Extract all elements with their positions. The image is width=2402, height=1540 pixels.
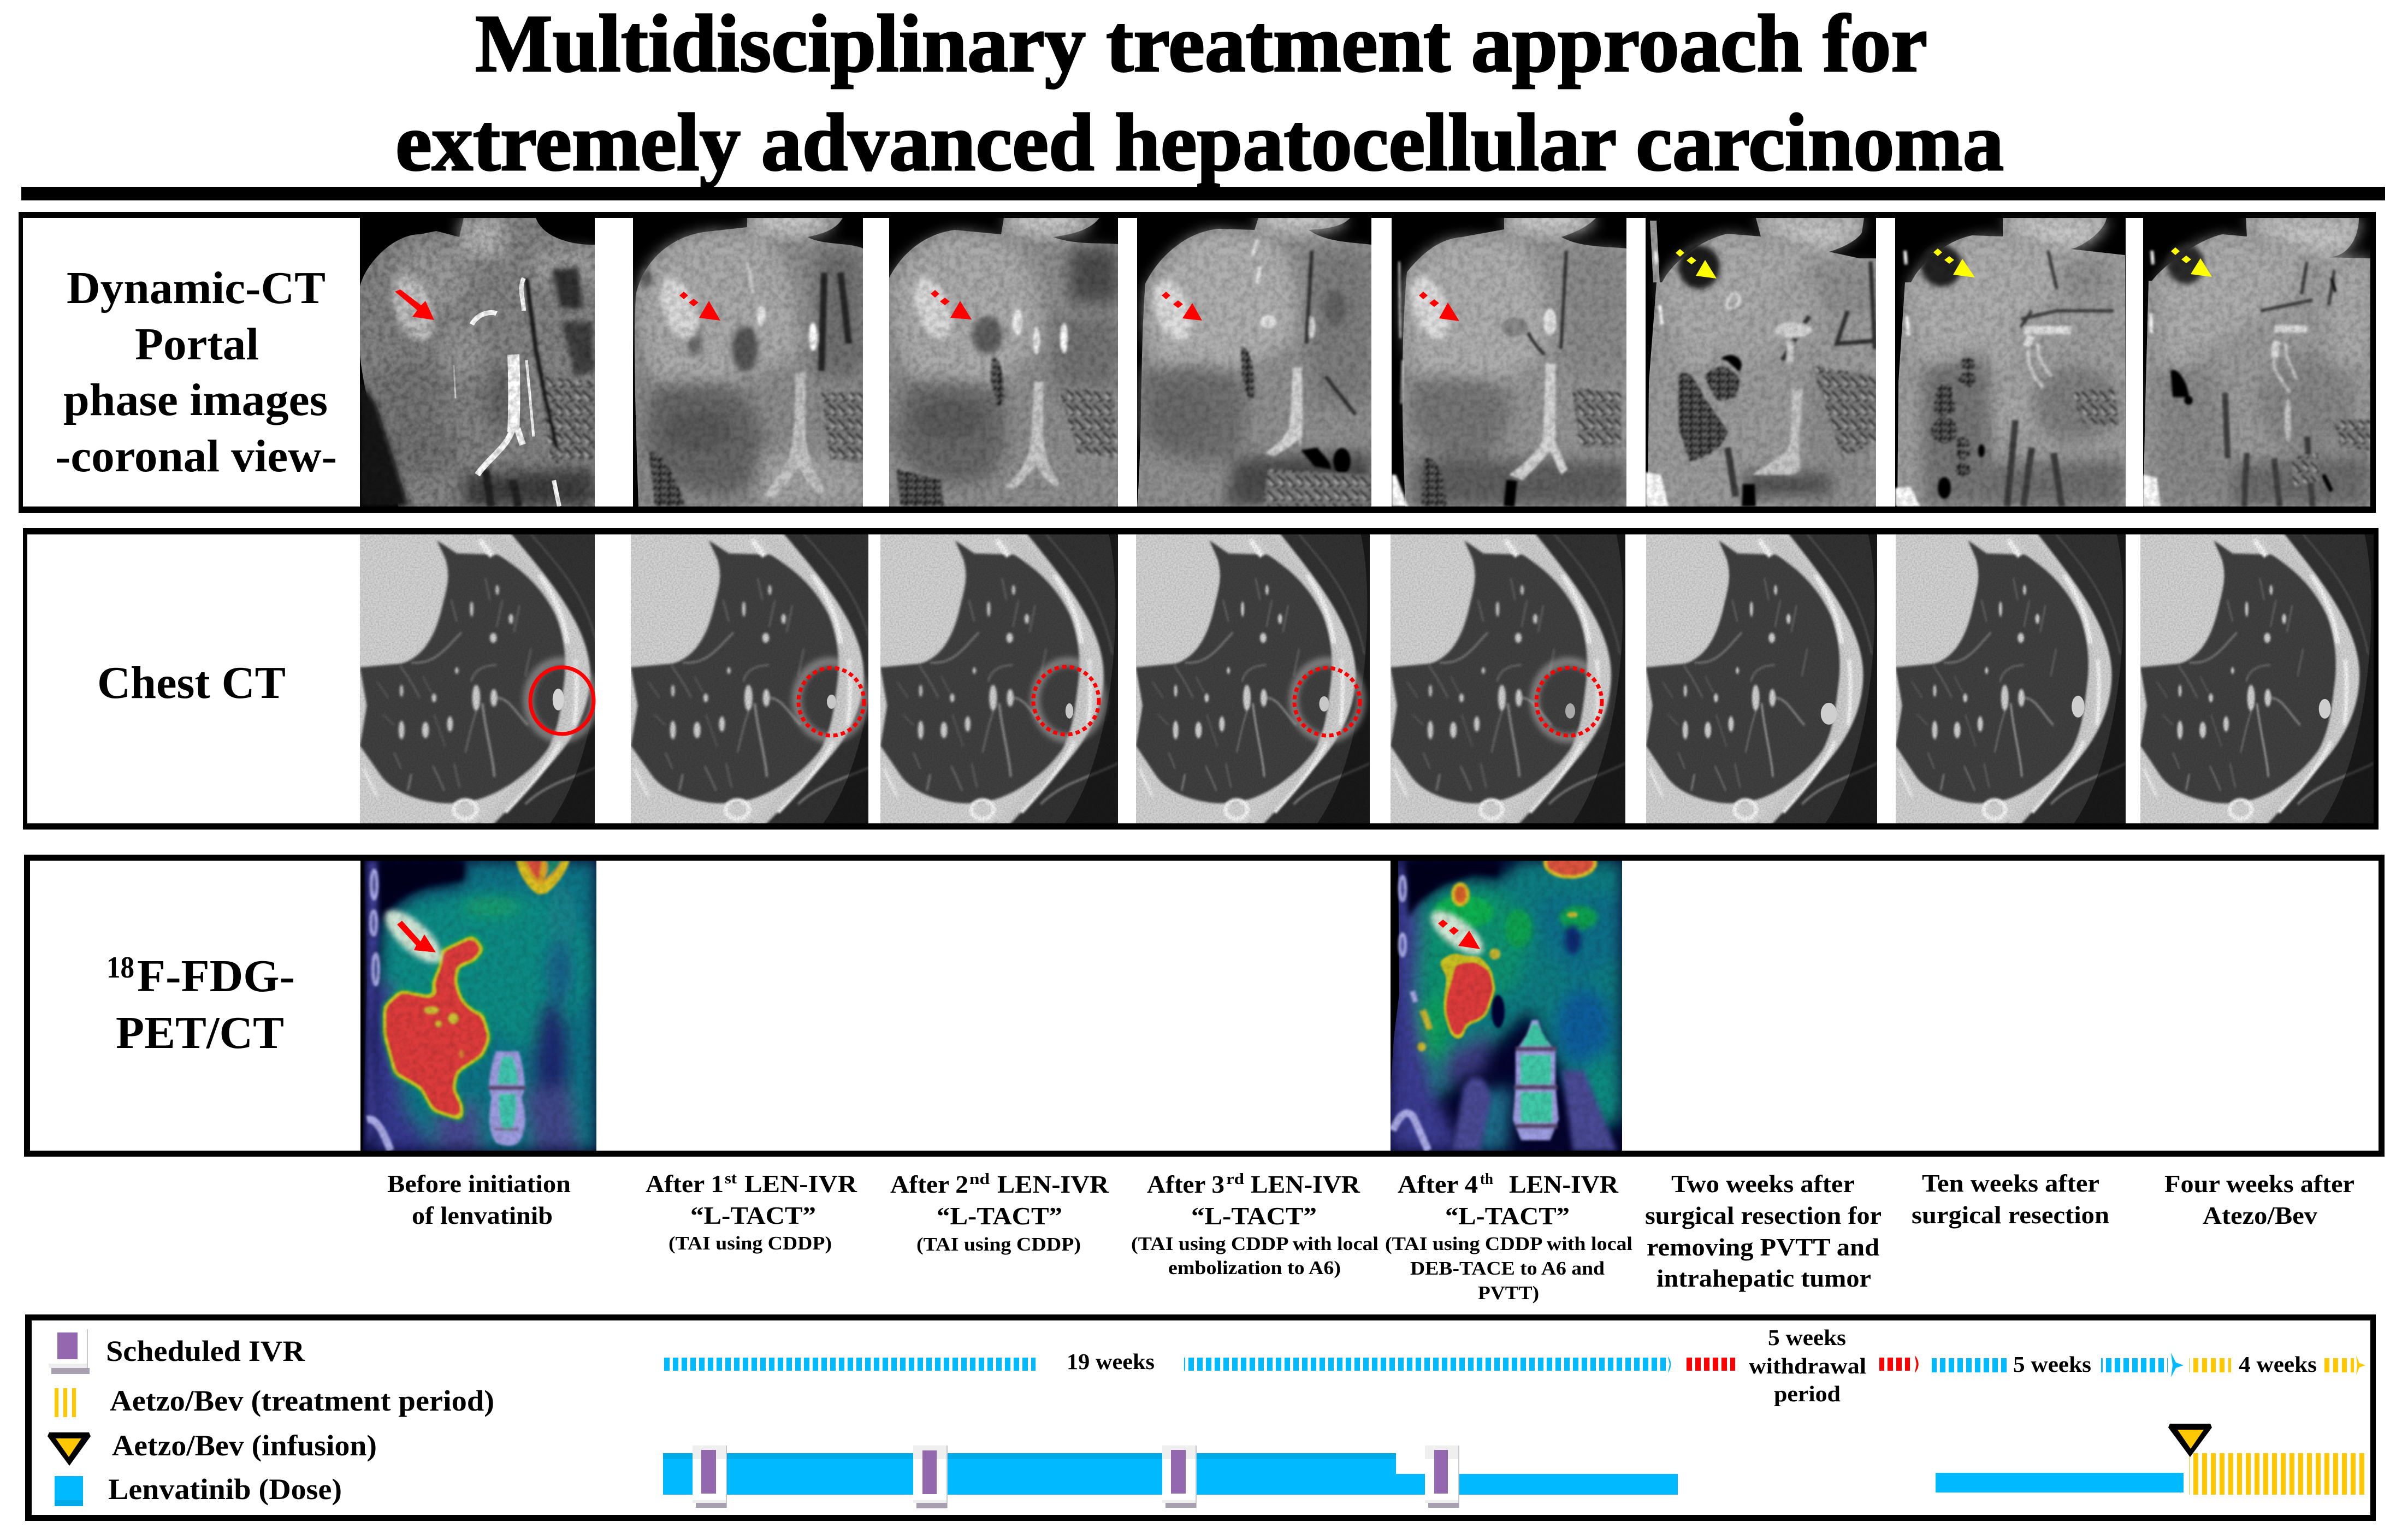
arrow: dotted red, after 1st [679,292,720,321]
marker: IVR 1 [693,1446,727,1508]
label: two weeks after resection: surgical resection for [1645,1201,1882,1229]
row label: PET/CT: F-FDG- [137,951,295,1002]
circle: dotted red, after 1st [798,668,864,736]
duration arrow: withdrawal period: 5 weeks [1768,1325,1846,1350]
label: two weeks after resection: Two weeks after [1671,1170,1855,1198]
label: two weeks after resection: intrahepatic tumor [1656,1264,1871,1292]
legend: scheduled IVR [49,1329,305,1374]
label: after 4th: LEN-IVR [1509,1170,1619,1198]
marker: IVR 3 [1162,1446,1197,1508]
label: after 3rd: After 3 [1147,1170,1224,1198]
CT image: after 1st LEN-IVR [633,218,863,507]
label: four weeks after Atezo/Bev [2164,1170,2354,1229]
label: after 2nd: (TAI using CDDP) [916,1234,1081,1255]
circle: dotted red, after 2nd [1033,667,1099,735]
chest image: after 3rd [1136,532,1375,826]
chest image: after 1st [631,534,868,824]
duration arrow: Atezo/Bev 4 weeks: 4 weeks [2239,1352,2317,1377]
bar: lenvatinib dose after surgery [1936,1473,2184,1492]
row label: dynamic CT: -coronal view- [55,431,337,482]
panel: treatment timeline [25,1314,2376,1521]
arrow: solid red on PET [397,921,436,952]
label: after 3rd: (TAI using CDDP with local [1131,1233,1379,1254]
row label: dynamic CT: phase images [63,375,328,425]
label: two weeks after resection [1645,1170,1882,1292]
CT image: ten weeks after surgery [1895,218,2126,507]
chest image: after 4th [1391,532,1631,826]
row label: PET/CT [107,951,295,1058]
label: two weeks after resection: removing PVTT and [1647,1233,1879,1261]
duration arrow: lenvatinib 5 weeks: 5 weeks [2013,1352,2091,1377]
label: after 4th [1385,1170,1632,1304]
title rule [21,187,2385,200]
row label: PET/CT: 18 [107,951,134,985]
marker: IVR 4 [1425,1446,1459,1508]
label: ten weeks after resection [1912,1169,2109,1229]
label: after 4th: PVTT) [1478,1282,1539,1304]
label: after 2nd: nd [969,1171,990,1188]
legend: Aetzo/Bev treatment period: Aetzo/Bev (treatment period) [110,1384,494,1417]
legend: Aetzo/Bev infusion: Aetzo/Bev (infusion) [112,1429,377,1462]
PET image: after 4th LEN-IVR [1391,849,1622,1151]
arrow: dotted red, after 4th [1419,292,1459,321]
label: after 2nd [890,1170,1109,1255]
PET image: before lenvatinib [360,861,596,1151]
marker: Atezo/Bev infusion [2168,1424,2212,1457]
legend: lenvatinib dose: Lenvatinib (Dose) [108,1473,342,1506]
legend: scheduled IVR: Scheduled IVR [106,1335,305,1367]
duration arrow: lenvatinib 19 weeks: 19 weeks [1067,1349,1155,1374]
circle: solid red nodule marker [530,667,594,734]
label: before initiation: Before initiation [387,1170,571,1198]
label: after 4th: th [1480,1171,1493,1188]
label: four weeks after Atezo/Bev: Four weeks after [2164,1170,2354,1198]
bar: Atezo/Bev treatment [2189,1453,2366,1495]
CT image: after 3rd LEN-IVR [1137,218,1371,507]
label: after 1st: LEN-IVR [744,1170,857,1198]
chest image: before lenvatinib [360,534,595,824]
title: extremely advanced hepatocellular carcinoma [395,97,2004,188]
duration arrow: lenvatinib 5 weeks [1932,1352,2184,1377]
label: after 4th: After 4 [1398,1170,1478,1198]
label: after 3rd: rd [1226,1171,1245,1188]
PET spine [488,1051,525,1146]
CT image: two weeks after surgery [1646,218,1876,507]
panel: FDG PET/CT [24,849,2385,1157]
duration arrow: withdrawal period: period [1774,1381,1841,1406]
title: Multidisciplinary treatment approach for [475,0,1927,89]
chest image: ten weeks after surgery [1896,532,2131,826]
chest image: four weeks after Atezo/Bev [2140,532,2379,826]
label: ten weeks after resection: Ten weeks after [1922,1169,2099,1197]
PET spine [1513,1020,1559,1140]
chest image: two weeks after surgery [1646,532,1883,826]
panel: chest CT [23,528,2379,830]
label: before initiation: of lenvatinib [412,1201,553,1229]
label: after 3rd [1131,1170,1379,1278]
duration arrow: withdrawal period [1685,1325,1919,1406]
panel: dynamic CT [19,208,2376,513]
label: before initiation [387,1170,571,1229]
label: after 4th: DEB-TACE to A6 and [1410,1258,1605,1279]
arrow: dotted red on PET [1438,920,1480,949]
arrow: dotted yellow, four weeks after Atezo/Bev [2171,247,2212,277]
label: after 4th: (TAI using CDDP with local [1385,1233,1632,1254]
label: after 1st: After 1 [646,1170,724,1198]
marker: IVR 2 [913,1446,948,1508]
row label: PET/CT: PET/CT [116,1008,284,1058]
arrow: dotted yellow, two weeks after surgery [1676,249,1717,279]
label: after 2nd: After 2 [890,1170,968,1198]
arrow: dotted yellow, ten weeks after surgery [1933,248,1975,277]
circle: dotted red, after 3rd [1294,668,1360,736]
label: after 1st [646,1170,857,1254]
label: after 1st: st [725,1170,737,1187]
CT image: after 4th LEN-IVR [1392,218,1626,507]
bar: lenvatinib dose [663,1453,1678,1495]
arrow: dotted red, after 2nd [931,290,972,319]
arrow: solid red, before lenvatinib [395,289,434,320]
label: after 1st: “L-TACT” [690,1201,816,1229]
duration arrow: lenvatinib 19 weeks [663,1349,1671,1374]
label: four weeks after Atezo/Bev: Atezo/Bev [2203,1201,2317,1229]
PET tumour [387,939,487,1117]
legend: Aetzo/Bev infusion [48,1429,377,1466]
CT image: after 2nd LEN-IVR [889,218,1118,507]
label: after 3rd: LEN-IVR [1251,1170,1360,1198]
label: after 2nd: “L-TACT” [937,1202,1062,1230]
CT image: before lenvatinib [360,218,595,507]
label: after 3rd: “L-TACT” [1191,1202,1317,1230]
title [395,0,2004,188]
arrow: dotted red, after 3rd [1162,292,1202,321]
chest image: after 2nd [880,534,1118,824]
label: after 2nd: LEN-IVR [997,1170,1109,1198]
duration arrow: withdrawal period: withdrawal [1749,1353,1866,1378]
label: after 3rd: embolization to A6) [1168,1257,1341,1278]
column labels [387,1169,2354,1304]
label: after 4th: “L-TACT” [1445,1202,1570,1230]
row label: dynamic CT: Dynamic-CT [67,263,326,313]
row label: dynamic CT [55,263,337,482]
label: after 1st: (TAI using CDDP) [668,1233,832,1254]
row label: chest CT: Chest CT [97,658,286,708]
PET heart uptake [516,861,570,895]
row label: dynamic CT: Portal [135,319,259,370]
label: ten weeks after resection: surgical resection [1912,1201,2109,1229]
CT image: four weeks after Atezo/Bev [2143,218,2370,507]
circle: dotted red, after 4th [1536,668,1602,736]
duration arrow: Atezo/Bev 4 weeks [2189,1352,2365,1377]
